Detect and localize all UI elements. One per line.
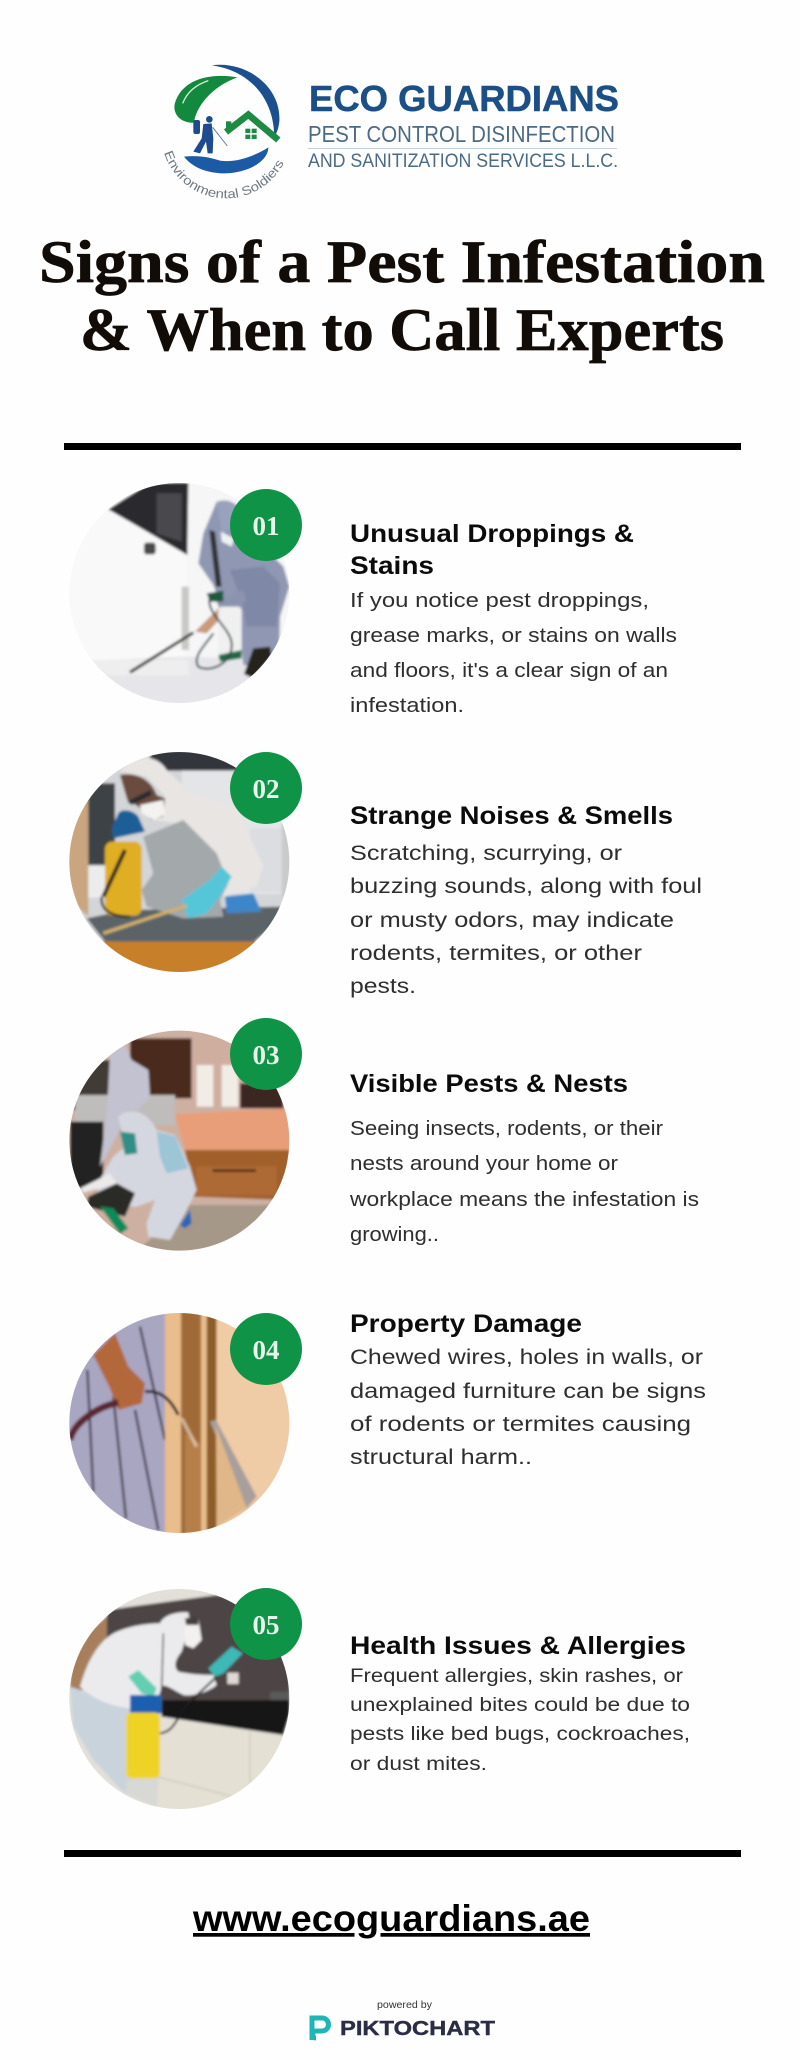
body text: damaged furniture can be signs	[350, 1379, 706, 1403]
heading: Health Issues & Allergies	[350, 1632, 686, 1660]
body text: If you notice pest droppings,	[350, 589, 649, 612]
heading: Property Damage	[350, 1310, 582, 1338]
badge 01: 01	[252, 511, 280, 541]
body text: workplace means the infestation is	[349, 1189, 699, 1211]
company tagline line 2: AND SANITIZATION SERVICES L.L.C.	[308, 150, 618, 172]
heading: Strange Noises & Smells	[350, 802, 673, 830]
badge 02	[230, 752, 302, 824]
badge 03	[230, 1018, 302, 1090]
badge 04	[230, 1313, 302, 1385]
body text: Chewed wires, holes in walls, or	[350, 1345, 703, 1369]
heading	[350, 520, 634, 580]
photo: hand spraying wood frame	[69, 1313, 290, 1533]
icon: Piktochart mark	[312, 2018, 328, 2040]
body text	[349, 1118, 699, 1246]
body text: grease marks, or stains on walls	[350, 624, 677, 647]
body text: of rodents or termites causing	[350, 1412, 691, 1436]
website link: www.ecoguardians.ae	[192, 1898, 590, 1939]
body text: rodents, termites, or other	[350, 941, 642, 965]
body text	[350, 841, 702, 998]
photo: two technicians in living room	[69, 1030, 290, 1251]
badge 01	[230, 489, 302, 561]
body text: nests around your home or	[350, 1153, 618, 1175]
footer: powered by Piktochart	[312, 1999, 496, 2040]
photo: technician spraying kitchen	[92, 483, 290, 703]
body text	[350, 589, 677, 717]
title: Signs of a Pest Infestation	[39, 229, 765, 295]
photo: technician spraying floor	[69, 752, 290, 972]
photo: technician spraying kitchen wall	[69, 1589, 290, 1809]
body text	[350, 1666, 690, 1775]
body text: growing..	[350, 1224, 439, 1246]
heading: Stains	[350, 552, 434, 580]
panel: sign 01	[63, 477, 677, 717]
body text: pests.	[350, 974, 416, 998]
body text: Scratching, scurrying, or	[350, 841, 622, 865]
body text	[350, 1345, 706, 1469]
company name: ECO GUARDIANS	[309, 78, 619, 119]
panel: sign 05	[63, 1587, 690, 1820]
company tagline line 1: PEST CONTROL DISINFECTION	[308, 121, 615, 147]
logo	[164, 64, 619, 198]
body text: Seeing insects, rodents, or their	[350, 1118, 663, 1140]
title	[39, 229, 765, 363]
heading: Unusual Droppings &	[350, 520, 634, 548]
panel: sign 03	[63, 1018, 699, 1260]
badge 02: 02	[252, 774, 280, 804]
logo emblem	[164, 64, 284, 198]
body text: or dust mites.	[350, 1754, 487, 1775]
body text: unexplained bites could be due to	[350, 1695, 690, 1716]
badge 05	[230, 1588, 302, 1660]
body text: and floors, it's a clear sign of an	[350, 659, 668, 682]
panel: sign 04	[63, 1307, 706, 1540]
logo emblem: Environmental Soldiers	[164, 150, 284, 198]
body text: Frequent allergies, skin rashes, or	[350, 1666, 684, 1687]
title: & When to Call Experts	[80, 297, 724, 363]
panel: sign 02	[63, 747, 702, 998]
badge 03: 03	[252, 1040, 280, 1070]
body text: pests like bed bugs, cockroaches,	[350, 1724, 690, 1745]
badge 04: 04	[252, 1335, 280, 1365]
body text: buzzing sounds, along with foul	[350, 874, 702, 898]
badge 05: 05	[252, 1610, 280, 1640]
powered by label: powered by	[377, 1999, 433, 2011]
body text: or musty odors, may indicate	[350, 908, 674, 932]
heading: Visible Pests & Nests	[350, 1070, 628, 1098]
Piktochart wordmark: PIKTOCHART	[340, 2017, 496, 2040]
body text: infestation.	[350, 694, 464, 717]
body text: structural harm..	[350, 1445, 532, 1469]
